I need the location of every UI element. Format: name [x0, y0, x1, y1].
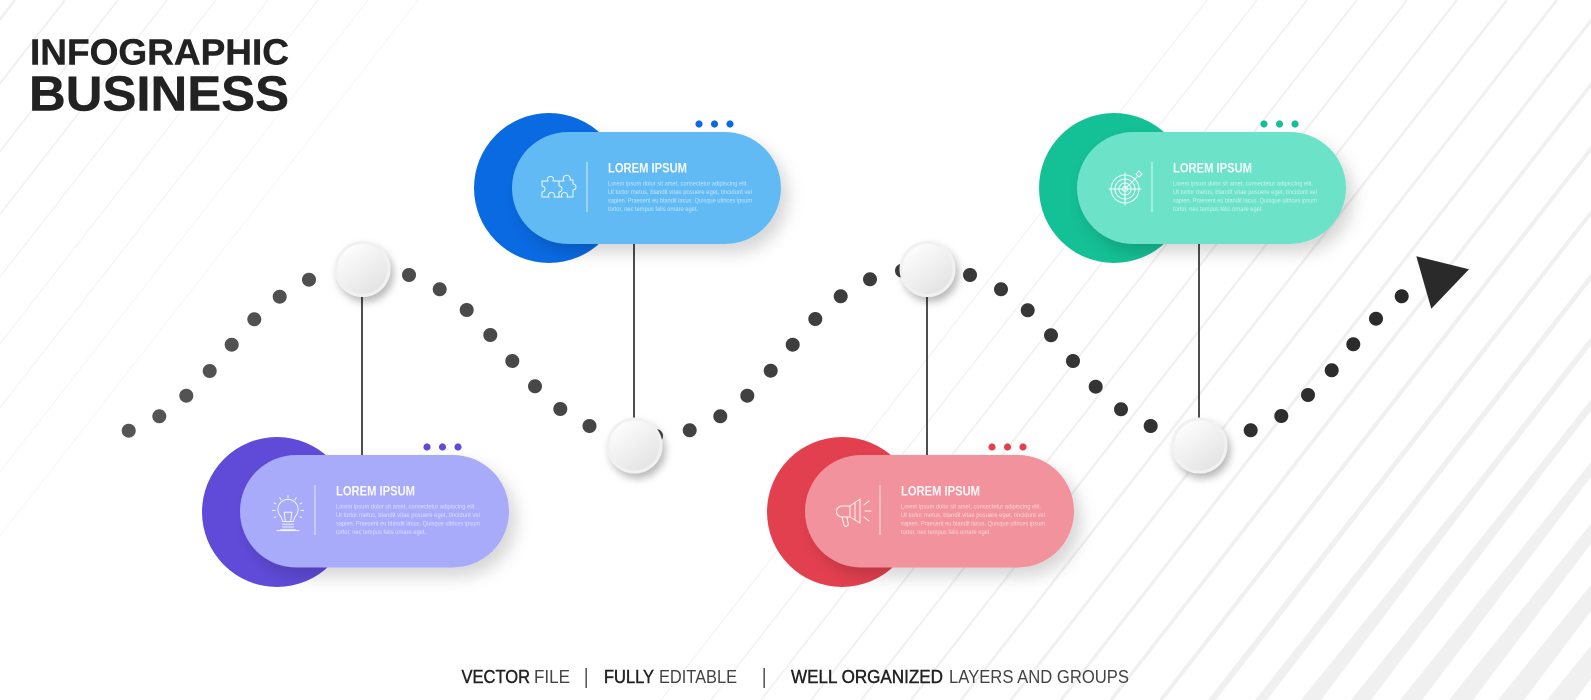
- footer caption: FILE: [534, 667, 570, 687]
- text: heading and body: tortor, nec tempus felis ornare eget.: [336, 529, 426, 536]
- text: heading and body: [901, 484, 1045, 536]
- panel: blue card: [474, 113, 781, 263]
- footer caption: [462, 667, 1129, 688]
- text: heading and body: tortor, nec tempus felis ornare eget.: [1173, 206, 1263, 213]
- text: heading and body: LOREM IPSUM: [608, 160, 687, 176]
- text: heading and body: Lorem ipsum dolor sit amet, consectetur adipiscing elit.: [1173, 180, 1313, 188]
- text: heading and body: LOREM IPSUM: [1173, 160, 1252, 176]
- timeline node 4: [1172, 418, 1228, 474]
- footer caption: EDITABLE: [659, 667, 737, 687]
- text: heading and body: LOREM IPSUM: [336, 484, 415, 498]
- title: BUSINESS: [29, 66, 289, 122]
- text: heading and body: sapien. Praesent eu blandit lacus. Quisque ultrices ipsum: [901, 520, 1045, 528]
- timeline node 3: [900, 241, 956, 297]
- text: heading and body: [608, 160, 752, 213]
- text: heading and body: Ut tortor metus, blandit vitae posuere eget, tincidunt vel: [336, 512, 480, 519]
- title: [29, 32, 289, 122]
- text: heading and body: sapien. Praesent eu blandit lacus. Quisque ultrices ipsum: [608, 198, 752, 204]
- text: heading and body: [336, 484, 480, 536]
- text: heading and body: Ut tortor metus, blandit vitae posuere eget, tincidunt vel: [608, 189, 752, 196]
- text: heading and body: sapien. Praesent eu blandit lacus. Quisque ultrices ipsum: [1173, 198, 1317, 204]
- icon: megaphone: [836, 499, 871, 526]
- footer caption: WELL ORGANIZED: [791, 667, 943, 687]
- connector lines: [362, 240, 1199, 456]
- footer caption: FULLY: [604, 667, 654, 687]
- text: heading and body: Lorem ipsum dolor sit amet, consectetur adipiscing elit.: [608, 180, 748, 188]
- title: INFOGRAPHIC: [30, 32, 289, 72]
- text: heading and body: Lorem ipsum dolor sit amet, consectetur adipiscing elit.: [901, 504, 1041, 510]
- icon: target: [1109, 171, 1142, 205]
- panel: red card: [767, 437, 1074, 587]
- panel: purple card: [202, 437, 509, 587]
- icon: light bulb: [272, 496, 304, 531]
- text: heading and body: Lorem ipsum dolor sit amet, consectetur adipiscing elit.: [336, 504, 476, 510]
- text: heading and body: LOREM IPSUM: [901, 484, 980, 498]
- text: heading and body: [1173, 160, 1317, 213]
- icon: puzzle: [542, 175, 576, 197]
- panel: green card: [1039, 113, 1346, 263]
- arrow head: [1416, 256, 1469, 309]
- text: heading and body: Ut tortor metus, blandit vitae posuere eget, tincidunt vel: [1173, 189, 1317, 196]
- timeline node 1: [334, 241, 390, 297]
- text: heading and body: sapien. Praesent eu blandit lacus. Quisque ultrices ipsum: [336, 520, 480, 528]
- timeline node 2: [606, 418, 662, 474]
- text: heading and body: Ut tortor metus, blandit vitae posuere eget, tincidunt vel: [901, 512, 1045, 519]
- footer caption: LAYERS AND GROUPS: [949, 667, 1129, 687]
- text: heading and body: tortor, nec tempus felis ornare eget.: [608, 206, 698, 213]
- footer caption: VECTOR: [462, 667, 530, 687]
- text: heading and body: tortor, nec tempus felis ornare eget.: [901, 529, 991, 536]
- dotted rising path: [122, 264, 1409, 443]
